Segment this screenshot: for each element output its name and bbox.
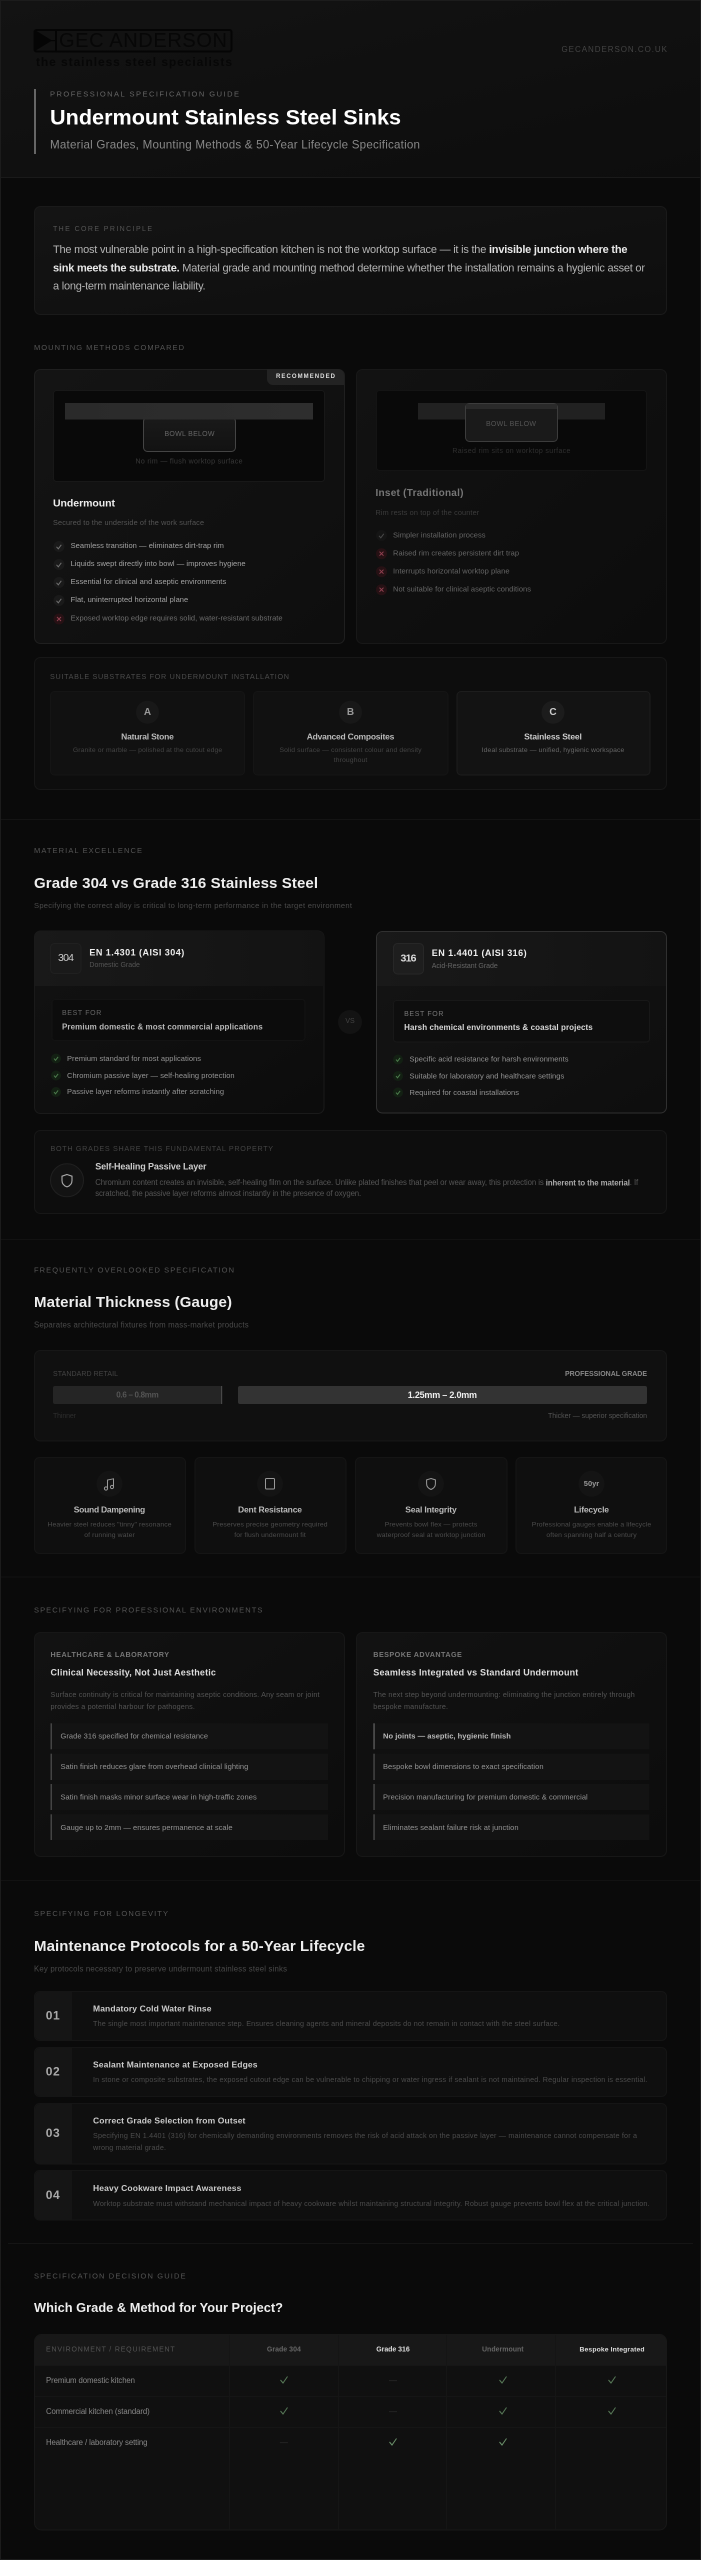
card: stainless steel: Stainless Steel (524, 732, 582, 742)
card: advanced composites (254, 692, 448, 775)
row: premium domestic kitchen (46, 2376, 616, 2385)
card: natural stone (50, 692, 244, 775)
step 03: 03 (46, 2126, 60, 2140)
step 04 (34, 2170, 666, 2220)
best for box (52, 1000, 305, 1040)
card: lifecycle: Lifecycle (574, 1505, 609, 1515)
core principle label: THE CORE PRINCIPLE (53, 226, 152, 233)
requirement rows: Precision manufacturing for premium domestic & commercial (383, 1792, 588, 1802)
best for box: BEST FOR (404, 1011, 443, 1018)
heading: inset: Inset (Traditional) (376, 488, 464, 499)
subheading: Rim rests on top of the counter (376, 508, 480, 517)
requirement rows: Grade 316 specified for chemical resistance (60, 1732, 208, 1740)
section label: mounting methods: MOUNTING METHODS COMPARED (34, 343, 185, 352)
logo (34, 30, 232, 69)
row: commercial kitchen: — (389, 2407, 397, 2416)
step 01: Mandatory Cold Water Rinse (93, 2003, 212, 2013)
logo: GEC ANDERSON (59, 30, 227, 52)
table header: ENVIRONMENT / REQUIREMENT (46, 2346, 175, 2354)
requirement rows: Bespoke bowl dimensions to exact specification (383, 1762, 544, 1771)
row: commercial kitchen (46, 2407, 616, 2416)
row: healthcare setting: Healthcare / laboratory setting (46, 2438, 148, 2447)
grade list: Specific acid resistance for harsh environments (410, 1054, 569, 1064)
section: thickness heading: FREQUENTLY OVERLOOKED SPECIFICATION (34, 1266, 234, 1274)
table header: Grade 316 (376, 2346, 410, 2354)
card: lifecycle (516, 1458, 666, 1554)
grade badge (394, 944, 424, 974)
card: dent resistance (195, 1458, 346, 1554)
step 02 (34, 2048, 666, 2096)
panel: healthcare and laboratory: provides a potential harbour for pathogens. (50, 1702, 195, 1711)
vs marker (338, 1010, 362, 1034)
card: seal integrity: waterproof seal at worktop junction (376, 1532, 486, 1539)
card: sound dampening (34, 1458, 186, 1554)
card: lifecycle: Professional gauges enable a lifecycle (532, 1522, 651, 1528)
website: GECANDERSON.CO.UK (562, 45, 668, 54)
diagram: inset: Raised rim sits on worktop surface (452, 448, 570, 455)
vs marker: VS (345, 1018, 355, 1025)
grade list: Premium standard for most applications (67, 1054, 201, 1063)
panel: grade 316: EN 1.4401 (AISI 316) (432, 948, 527, 958)
eyebrow: PROFESSIONAL SPECIFICATION GUIDE (50, 90, 239, 98)
table header: Grade 304 (267, 2346, 301, 2354)
grade badge (50, 944, 81, 974)
step 03: wrong material grade. (92, 2143, 166, 2152)
section: material grades heading (34, 846, 353, 910)
logo: the stainless steel specialists (36, 55, 232, 69)
step 03: Specifying EN 1.4401 (316) for chemically demanding environments removes the risk of acid attack on the passive layer — maintenance cannot compensate for a (93, 2131, 637, 2140)
step 03: Correct Grade Selection from Outset (93, 2116, 246, 2126)
card: seal integrity: Prevents bowl flex — protects (385, 1522, 478, 1528)
section: decision guide heading: Which Grade & Method for Your Project? (34, 2300, 283, 2315)
diagram: inset (376, 390, 646, 470)
card: sound dampening: of running water (84, 1532, 135, 1539)
feature list: Liquids swept directly into bowl — improves hygiene (71, 559, 246, 568)
row: healthcare setting: — (280, 2438, 288, 2447)
bar: standard retail (53, 1386, 222, 1404)
feature list: Interrupts horizontal worktop plane (393, 566, 510, 576)
step 02: 02 (46, 2065, 60, 2079)
core principle text: a long-term maintenance liability. (53, 280, 206, 292)
section: material grades heading: Specifying the correct alloy is critical to long-term performance in the target environment (34, 901, 353, 910)
row: commercial kitchen: Commercial kitchen (standard) (46, 2407, 150, 2416)
row: premium domestic kitchen: Premium domestic kitchen (46, 2376, 135, 2385)
grade list (51, 1054, 235, 1097)
feature list: Not suitable for clinical aseptic conditions (393, 584, 531, 594)
card: advanced composites: B (347, 707, 354, 718)
panel: gauge chart: Thinner (53, 1413, 77, 1420)
icon: music note (96, 1471, 122, 1497)
grade list: Chromium passive layer — self-healing protection (67, 1071, 235, 1080)
panel: grade 304: EN 1.4301 (AISI 304) (89, 947, 184, 957)
section: maintenance heading (34, 1909, 365, 1974)
core principle text (53, 244, 645, 292)
section: thickness heading: Separates architectural fixtures from mass-market products (34, 1320, 249, 1330)
feature list: Essential for clinical and aseptic environments (71, 577, 226, 586)
best for box (394, 1000, 650, 1042)
section: maintenance heading: Maintenance Protocols for a 50-Year Lifecycle (34, 1938, 365, 1955)
step 03 (34, 2104, 666, 2164)
section label: professional environments: SPECIFYING FOR PROFESSIONAL ENVIRONMENTS (34, 1606, 262, 1614)
panel: bespoke advantage: Seamless Integrated vs Standard Undermount (373, 1668, 578, 1678)
panel: bespoke advantage: bespoke manufacture. (373, 1702, 448, 1711)
bar: professional grade (238, 1386, 647, 1404)
requirement rows (50, 1723, 328, 1840)
best for box: Harsh chemical environments & coastal projects (404, 1023, 593, 1032)
requirement rows: Eliminates sealant failure risk at junction (383, 1823, 518, 1832)
card: lifecycle: often spanning half a century (546, 1532, 637, 1539)
card: stainless steel: C (549, 707, 557, 718)
badge: recommended (267, 369, 344, 385)
row: healthcare setting (46, 2438, 506, 2447)
panel: bespoke advantage: The next step beyond undermounting: eliminating the junction entirely through (373, 1690, 635, 1699)
heading: undermount: Undermount (53, 498, 116, 510)
section: decision guide heading: SPECIFICATION DECISION GUIDE (34, 2272, 186, 2280)
grade badge: 304 (58, 952, 74, 964)
panel: healthcare and laboratory: Surface continuity is critical for maintaining aseptic conditions. Any seam or joint (50, 1690, 320, 1699)
step 01 (34, 1992, 666, 2040)
accent bar (34, 89, 36, 154)
best for box: Premium domestic & most commercial applications (62, 1022, 263, 1032)
feature list: Exposed worktop edge requires solid, water-resistant substrate (71, 614, 283, 622)
icon: 50yr (578, 1471, 604, 1497)
diagram: undermount (54, 390, 324, 482)
step 02: Sealant Maintenance at Exposed Edges (93, 2060, 258, 2070)
diagram: undermount: No rim — flush worktop surface (136, 458, 243, 466)
panel: self-healing passive layer: Self-Healing Passive Layer (95, 1162, 207, 1172)
icon: shield (50, 1164, 84, 1197)
card: sound dampening: Sound Dampening (74, 1505, 145, 1515)
icon: square (257, 1471, 283, 1497)
card: sound dampening: Heavier steel reduces "tinny" resonance (48, 1522, 172, 1528)
panel: self-healing passive layer: BOTH GRADES SHARE THIS FUNDAMENTAL PROPERTY (50, 1144, 273, 1153)
panel: healthcare and laboratory: Clinical Necessity, Not Just Aesthetic (50, 1668, 216, 1678)
feature list: Flat, uninterrupted horizontal plane (71, 595, 188, 604)
table header: Bespoke Integrated (580, 2346, 644, 2354)
bar: professional grade: 1.25mm – 2.0mm (408, 1390, 477, 1400)
card: seal integrity: Seal Integrity (405, 1505, 457, 1515)
panel: inset (356, 370, 666, 644)
section: decision guide heading (34, 2272, 283, 2315)
panel: bespoke advantage (356, 1632, 666, 1856)
bar: standard retail: 0.6 – 0.8mm (116, 1390, 159, 1400)
core principle text: sink meets the substrate. Material grade and mounting method determine whether the installation remains a hygienic asset or (53, 263, 645, 275)
substrates label: SUITABLE SUBSTRATES FOR UNDERMOUNT INSTALLATION (50, 672, 289, 681)
table: decision guide (34, 2334, 666, 2530)
card: seal integrity (356, 1458, 507, 1554)
card: natural stone: Natural Stone (121, 732, 174, 742)
panel: self-healing passive layer: Chromium content creates an invisible, self-healing film on the surface. Unlike plated finishes that peel or wear away, this protection is inherent to the material. If (95, 1178, 639, 1187)
row: premium domestic kitchen: — (389, 2376, 397, 2385)
grade list: Passive layer reforms instantly after scratching (67, 1087, 224, 1096)
feature list: Simpler installation process (393, 530, 486, 540)
card: advanced composites: Solid surface — consistent colour and density (280, 747, 422, 754)
feature list: Seamless transition — eliminates dirt-trap rim (71, 541, 224, 550)
requirement rows: No joints — aseptic, hygienic finish (383, 1732, 511, 1740)
grade list: Suitable for laboratory and healthcare settings (410, 1072, 564, 1080)
grade list (393, 1054, 569, 1098)
panel: self-healing passive layer (34, 1130, 666, 1214)
requirement rows (373, 1723, 649, 1840)
card: dent resistance: Preserves precise geometry required (212, 1522, 328, 1528)
panel: grade 304: Domestic Grade (89, 962, 140, 969)
panel: healthcare and laboratory (34, 1632, 344, 1856)
panel: grade 316 (376, 932, 666, 1113)
feature list (54, 541, 283, 624)
step 02: In stone or composite substrates, the exposed cutout edge can be vulnerable to chipping or water ingress if sealant is not maintained. Regular inspection is essential. (93, 2075, 647, 2084)
step 04: Heavy Cookware Impact Awareness (93, 2183, 242, 2193)
section: maintenance heading: Key protocols necessary to preserve undermount stainless steel sinks (34, 1964, 287, 1974)
core principle text: The most vulnerable point in a high-specification kitchen is not the worktop surface — it is the invisible junction where the (53, 244, 628, 256)
diagram: inset: BOWL BELOW (486, 421, 536, 428)
panel: undermount (34, 369, 344, 644)
best for box: BEST FOR (62, 1010, 101, 1017)
panel: gauge chart (34, 1350, 666, 1441)
section: maintenance heading: SPECIFYING FOR LONGEVITY (34, 1909, 168, 1918)
section: thickness heading (34, 1266, 249, 1330)
panel: bespoke advantage: BESPOKE ADVANTAGE (373, 1650, 462, 1659)
panel: gauge chart: PROFESSIONAL GRADE (565, 1371, 647, 1378)
subtitle: Material Grades, Mounting Methods & 50-Year Lifecycle Specification (50, 138, 420, 152)
section: thickness heading: Material Thickness (Gauge) (34, 1294, 232, 1311)
panel: core principle (34, 206, 666, 314)
panel: self-healing passive layer: scratched, the passive layer reforms almost instantly in the presence of oxygen. (95, 1189, 361, 1198)
feature list (376, 530, 531, 595)
grade badge: 316 (400, 952, 417, 964)
section: material grades heading: Grade 304 vs Grade 316 Stainless Steel (34, 875, 318, 892)
card: dent resistance: Dent Resistance (238, 1505, 302, 1515)
section: header (1, 1, 700, 178)
badge: recommended: RECOMMENDED (276, 374, 336, 380)
card: dent resistance: for flush undermount fit (234, 1532, 306, 1539)
grade list: Required for coastal installations (410, 1088, 519, 1097)
panel: grade 304 (34, 931, 324, 1114)
feature list: Raised rim creates persistent dirt trap (393, 548, 519, 558)
card: natural stone: A (144, 707, 151, 718)
card: advanced composites: Advanced Composites (307, 732, 395, 742)
step 01: The single most important maintenance step. Ensures cleaning agents and mineral deposits do not remain in contact with the steel surface. (93, 2019, 560, 2028)
panel: gauge chart: Thicker — superior specification (548, 1413, 647, 1420)
panel: gauge chart: STANDARD RETAIL (53, 1371, 118, 1378)
card: advanced composites: throughout (334, 757, 367, 764)
step 04: 04 (46, 2188, 60, 2202)
step 01: 01 (46, 2009, 60, 2023)
title: Undermount Stainless Steel Sinks (50, 104, 401, 130)
icon: 50yr: 50yr (584, 1479, 599, 1488)
subheading: Secured to the underside of the work surface (53, 518, 204, 527)
diagram: undermount: BOWL BELOW (164, 431, 215, 438)
requirement rows: Gauge up to 2mm — ensures permanence at scale (60, 1823, 232, 1832)
table header: Undermount (482, 2346, 524, 2354)
table header (46, 2346, 644, 2354)
card: stainless steel (457, 692, 650, 775)
panel: healthcare and laboratory: HEALTHCARE & LABORATORY (50, 1650, 169, 1659)
section: material grades heading: MATERIAL EXCELLENCE (34, 846, 142, 855)
card: natural stone: Granite or marble — polished at the cutout edge (73, 747, 222, 754)
requirement rows: Satin finish reduces glare from overhead clinical lighting (60, 1762, 248, 1771)
panel: grade 316: Acid-Resistant Grade (432, 963, 498, 970)
step 04: Worktop substrate must withstand mechanical impact of heavy cookware whilst maintaining structural integrity. Robust gauge prevents bowl flex at the critical junction. (93, 2199, 650, 2208)
card: stainless steel: Ideal substrate — unified, hygienic workspace (482, 747, 625, 754)
panel: substrates (34, 658, 666, 790)
requirement rows: Satin finish masks minor surface wear in high-traffic zones (60, 1792, 257, 1802)
icon: shield (418, 1471, 444, 1497)
